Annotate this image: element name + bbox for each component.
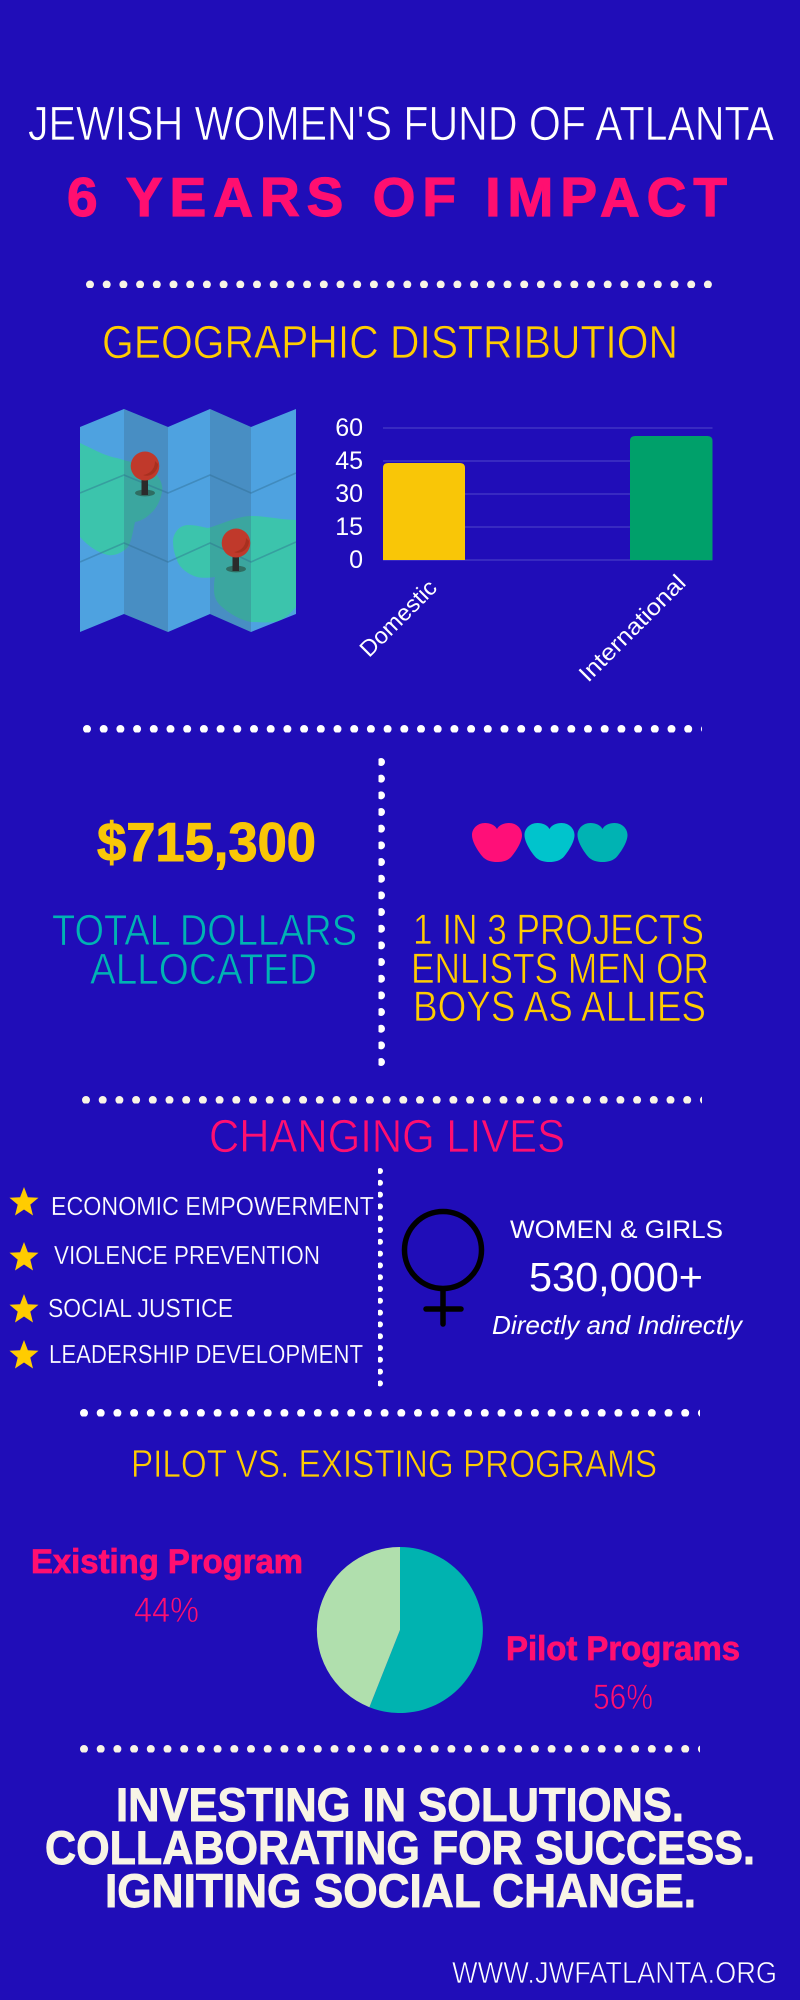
label: international: International <box>573 569 691 687</box>
label: pilot programs: 56% <box>593 1678 653 1717</box>
chart axis labels: 0 <box>349 546 363 574</box>
list item: leadership development: LEADERSHIP DEVELOPMENT <box>49 1339 363 1369</box>
stat: women and girls reached <box>492 1216 744 1340</box>
bar: domestic <box>383 463 465 560</box>
stat: women and girls reached: Directly and Indirectly <box>492 1310 744 1340</box>
label: pilot programs: Pilot Programs <box>506 1630 740 1668</box>
label: existing program: Existing Program <box>31 1543 303 1581</box>
heading: pilot vs existing programs: PILOT VS. EXISTING PROGRAMS <box>131 1443 657 1486</box>
list item: violence prevention: VIOLENCE PREVENTION <box>54 1240 320 1270</box>
icon: star <box>10 1294 38 1322</box>
icon: three hearts <box>472 823 628 862</box>
list item: economic empowerment: ECONOMIC EMPOWERMENT <box>51 1191 374 1221</box>
list: focus areas <box>10 1187 374 1369</box>
stat: women and girls reached: WOMEN & GIRLS <box>510 1216 723 1244</box>
text block: 1 in 3 projects: BOYS AS ALLIES <box>413 983 706 1031</box>
text block: total dollars allocated <box>52 906 357 994</box>
icon: star <box>10 1340 38 1368</box>
chart axis labels: 45 <box>335 447 363 475</box>
icon: star <box>10 1242 38 1270</box>
stat: women and girls reached: 530,000+ <box>529 1254 703 1300</box>
icon: folded map with pins <box>80 409 296 632</box>
icon: venus symbol <box>404 1212 482 1324</box>
text block: total dollars allocated: ALLOCATED <box>90 945 317 994</box>
closing statement: COLLABORATING FOR SUCCESS. <box>45 1821 755 1874</box>
label: existing program: 44% <box>134 1591 199 1630</box>
pie chart: pilot vs existing <box>317 1547 483 1713</box>
bar: international <box>630 436 712 560</box>
heading: geographic distribution: GEOGRAPHIC DISTRIBUTION <box>102 316 678 368</box>
title: 6 years of impact: 6 YEARS OF IMPACT <box>67 166 727 228</box>
chart axis labels: 30 <box>335 480 363 508</box>
icon: map pin two <box>222 528 250 572</box>
stat: total dollars: $715,300 <box>97 811 316 873</box>
text block: 1 in 3 projects: 1 IN 3 PROJECTS <box>413 906 704 954</box>
heading: changing lives: CHANGING LIVES <box>209 1110 565 1162</box>
text block: 1 in 3 projects: ENLISTS MEN OR <box>411 945 709 993</box>
label: domestic: Domestic <box>354 574 442 662</box>
list item: social justice: SOCIAL JUSTICE <box>48 1293 233 1323</box>
closing statement <box>45 1778 755 1917</box>
label: existing program <box>31 1543 303 1630</box>
closing statement: IGNITING SOCIAL CHANGE. <box>105 1864 696 1917</box>
text block: 1 in 3 projects <box>411 906 709 1031</box>
icon: map pin one <box>131 452 159 496</box>
chart axis labels: 15 <box>335 513 363 541</box>
bar chart: domestic vs international <box>335 414 712 687</box>
icon: star <box>10 1187 38 1216</box>
label: pilot programs <box>506 1630 740 1717</box>
closing statement: INVESTING IN SOLUTIONS. <box>116 1778 684 1831</box>
chart axis labels: 60 <box>335 414 363 442</box>
text block: total dollars allocated: TOTAL DOLLARS <box>52 906 357 955</box>
chart axis labels <box>335 414 363 574</box>
